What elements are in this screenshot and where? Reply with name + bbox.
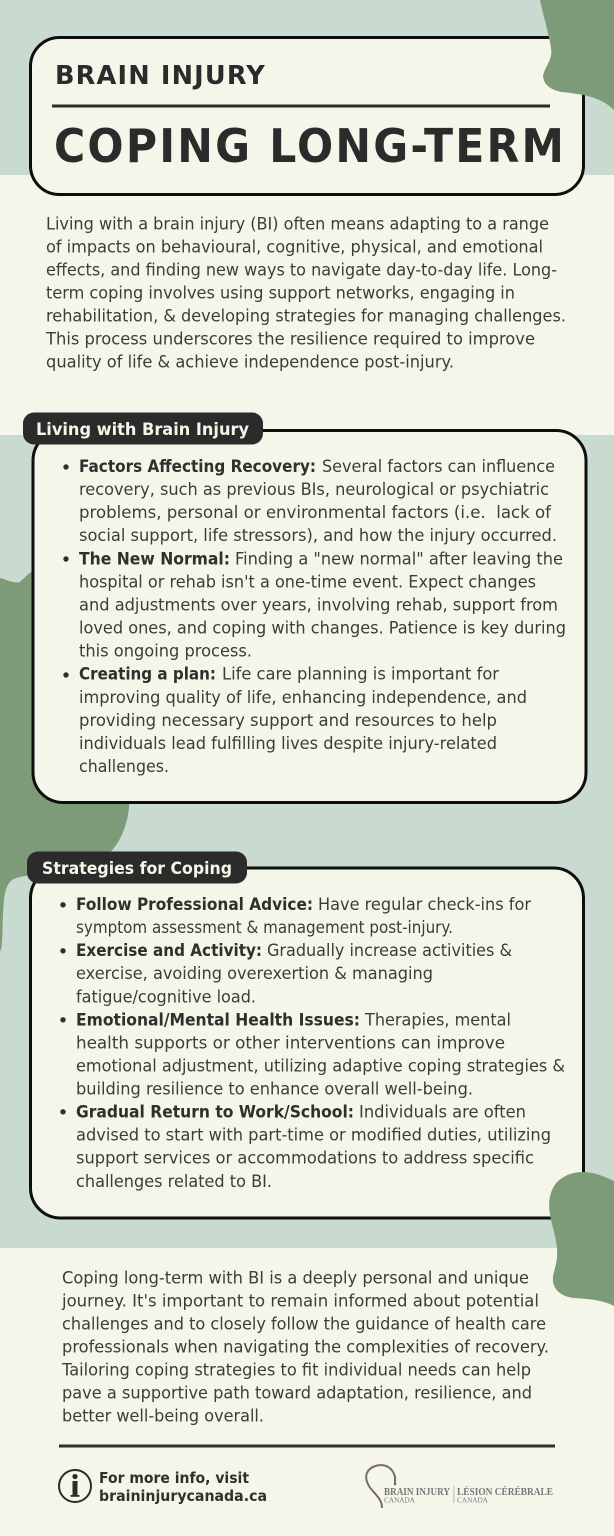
bullet: creating a plan: Creating a plan: [79,665,216,684]
icon: information [59,1470,91,1502]
bullet: gradual return to work or school: challenges related to BI. [76,1172,272,1191]
closing paragraph: professionals when navigating the complexities of recovery. [62,1338,549,1356]
heading chip: living with brain injury: Living with Brain Injury [36,420,249,440]
bullet: the new normal: Finding a "new normal" after leaving the [235,549,563,568]
heading chip: strategies for coping: Strategies for Coping [42,859,232,879]
bullet: follow professional advice: Have regular check-ins for [318,895,531,914]
bullet: exercise and activity: Gradually increase activities & [267,941,512,960]
bullet: factors affecting recovery [63,457,557,545]
heading chip: strategies for coping [27,852,247,884]
bullet: the new normal: loved ones, and coping with changes. Patience is key during [79,619,566,638]
closing paragraph: Tailoring coping strategies to fit individual needs can help [61,1361,531,1380]
more info link text: braininjurycanada.ca [99,1487,267,1505]
decorative blob: bottom right [549,1172,614,1306]
closing paragraph: pave a supportive path toward adaptation, resilience, and [62,1384,532,1403]
bullet: creating a plan: challenges. [79,757,169,776]
logo: brain injury canada [366,1465,553,1508]
bullet: exercise and activity: exercise, avoiding overexertion & managing [76,964,433,983]
bullet: exercise and activity: Exercise and Activity: [76,941,262,960]
title box [30,38,584,194]
logo: brain injury canada: CANADA [457,1496,489,1504]
title: brain injury: BRAIN INJURY [55,61,266,91]
closing paragraph [61,1268,549,1426]
bullet: gradual return to work or school: advised to start with part-time or modified duties, utilizing [76,1126,551,1145]
bullet: creating a plan: Life care planning is important for [222,665,499,684]
heading chip: living with brain injury [23,412,263,444]
bullet: the new normal: and adjustments over years, involving rehab, support from [79,596,558,614]
bullet: the new normal: The New Normal: [79,549,230,568]
bullet: gradual return to work or school: Gradual Return to Work/School: [76,1102,354,1121]
bullet: factors affecting recovery: Factors Affecting Recovery: [79,457,316,476]
closing paragraph: Coping long-term with BI is a deeply personal and unique [62,1268,529,1287]
closing paragraph: journey. It's important to remain informed about potential [61,1291,539,1310]
bullet: emotional and mental health issues: Emotional/Mental Health Issues: [76,1010,360,1029]
panel: strategies for coping [27,852,584,1218]
intro paragraph [45,214,566,372]
intro paragraph: This process underscores the resilience required to improve [45,330,535,349]
bullet: emotional and mental health issues [60,1010,565,1098]
bullet: the new normal [63,549,566,661]
bullet: emotional and mental health issues: health supports or other interventions can improve [76,1033,505,1052]
intro paragraph: rehabilitation, & developing strategies for managing challenges. [46,306,566,326]
bullet: creating a plan: providing necessary support and resources to help [79,711,497,730]
bullet: factors affecting recovery: problems, personal or environmental factors (i.e. lack of [79,503,552,522]
bullet: creating a plan [63,665,527,776]
logo: brain injury canada: CANADA [384,1496,416,1504]
bullet: the new normal: this ongoing process. [79,642,252,661]
intro paragraph: term coping involves using support networks, engaging in [46,284,515,302]
logo: brain injury canada: BRAIN INJURY [384,1487,450,1498]
bullet: gradual return to work or school [60,1102,551,1191]
intro paragraph: Living with a brain injury (BI) often means adapting to a range [46,214,549,233]
intro paragraph: of impacts on behavioural, cognitive, physical, and emotional [46,237,543,256]
bullet: gradual return to work or school: Individuals are often [359,1102,526,1121]
bullet: gradual return to work or school: support services or accommodations to address specific [76,1149,534,1168]
bullet: factors affecting recovery: recovery, such as previous BIs, neurological or psychiatric [79,480,549,499]
intro paragraph: quality of life & achieve independence post-injury. [46,353,454,372]
bullet: exercise and activity: fatigue/cognitive load. [76,987,256,1006]
bullet: factors affecting recovery: social support, life stressors), and how the injury occurred. [79,526,557,545]
decorative blob: top right [540,0,614,110]
bullet: creating a plan: improving quality of life, enhancing independence, and [79,688,527,707]
bullet: follow professional advice [60,895,531,937]
closing paragraph: challenges and to closely follow the guidance of health care [62,1314,546,1334]
panel: living with brain injury [23,412,586,802]
bullet: creating a plan: individuals lead fulfilling lives despite injury-related [79,734,497,753]
bullet: follow professional advice: symptom assessment & management post-injury. [76,918,453,937]
decorative blob: left [0,570,129,952]
bullet: exercise and activity [60,941,512,1006]
title: coping long-term: COPING LONG-TERM [54,119,566,173]
more info link text [99,1469,267,1505]
logo: brain injury canada: LÉSION CÉRÉBRALE [457,1486,553,1498]
bullet: factors affecting recovery: Several factors can influence [322,457,555,476]
bullet: the new normal: hospital or rehab isn't a one-time event. Expect changes [79,572,536,591]
bullet: emotional and mental health issues: building resilience to enhance overall well-being. [76,1079,473,1098]
bullet: emotional and mental health issues: Therapies, mental [364,1010,511,1029]
bullet: emotional and mental health issues: emotional adjustment, utilizing adaptive coping strategies & [76,1056,565,1075]
bullet: follow professional advice: Follow Professional Advice: [76,895,313,914]
intro paragraph: effects, and finding new ways to navigate day-to-day life. Long- [46,260,557,279]
closing paragraph: better well-being overall. [62,1407,264,1426]
more info link text: For more info, visit [99,1469,250,1487]
